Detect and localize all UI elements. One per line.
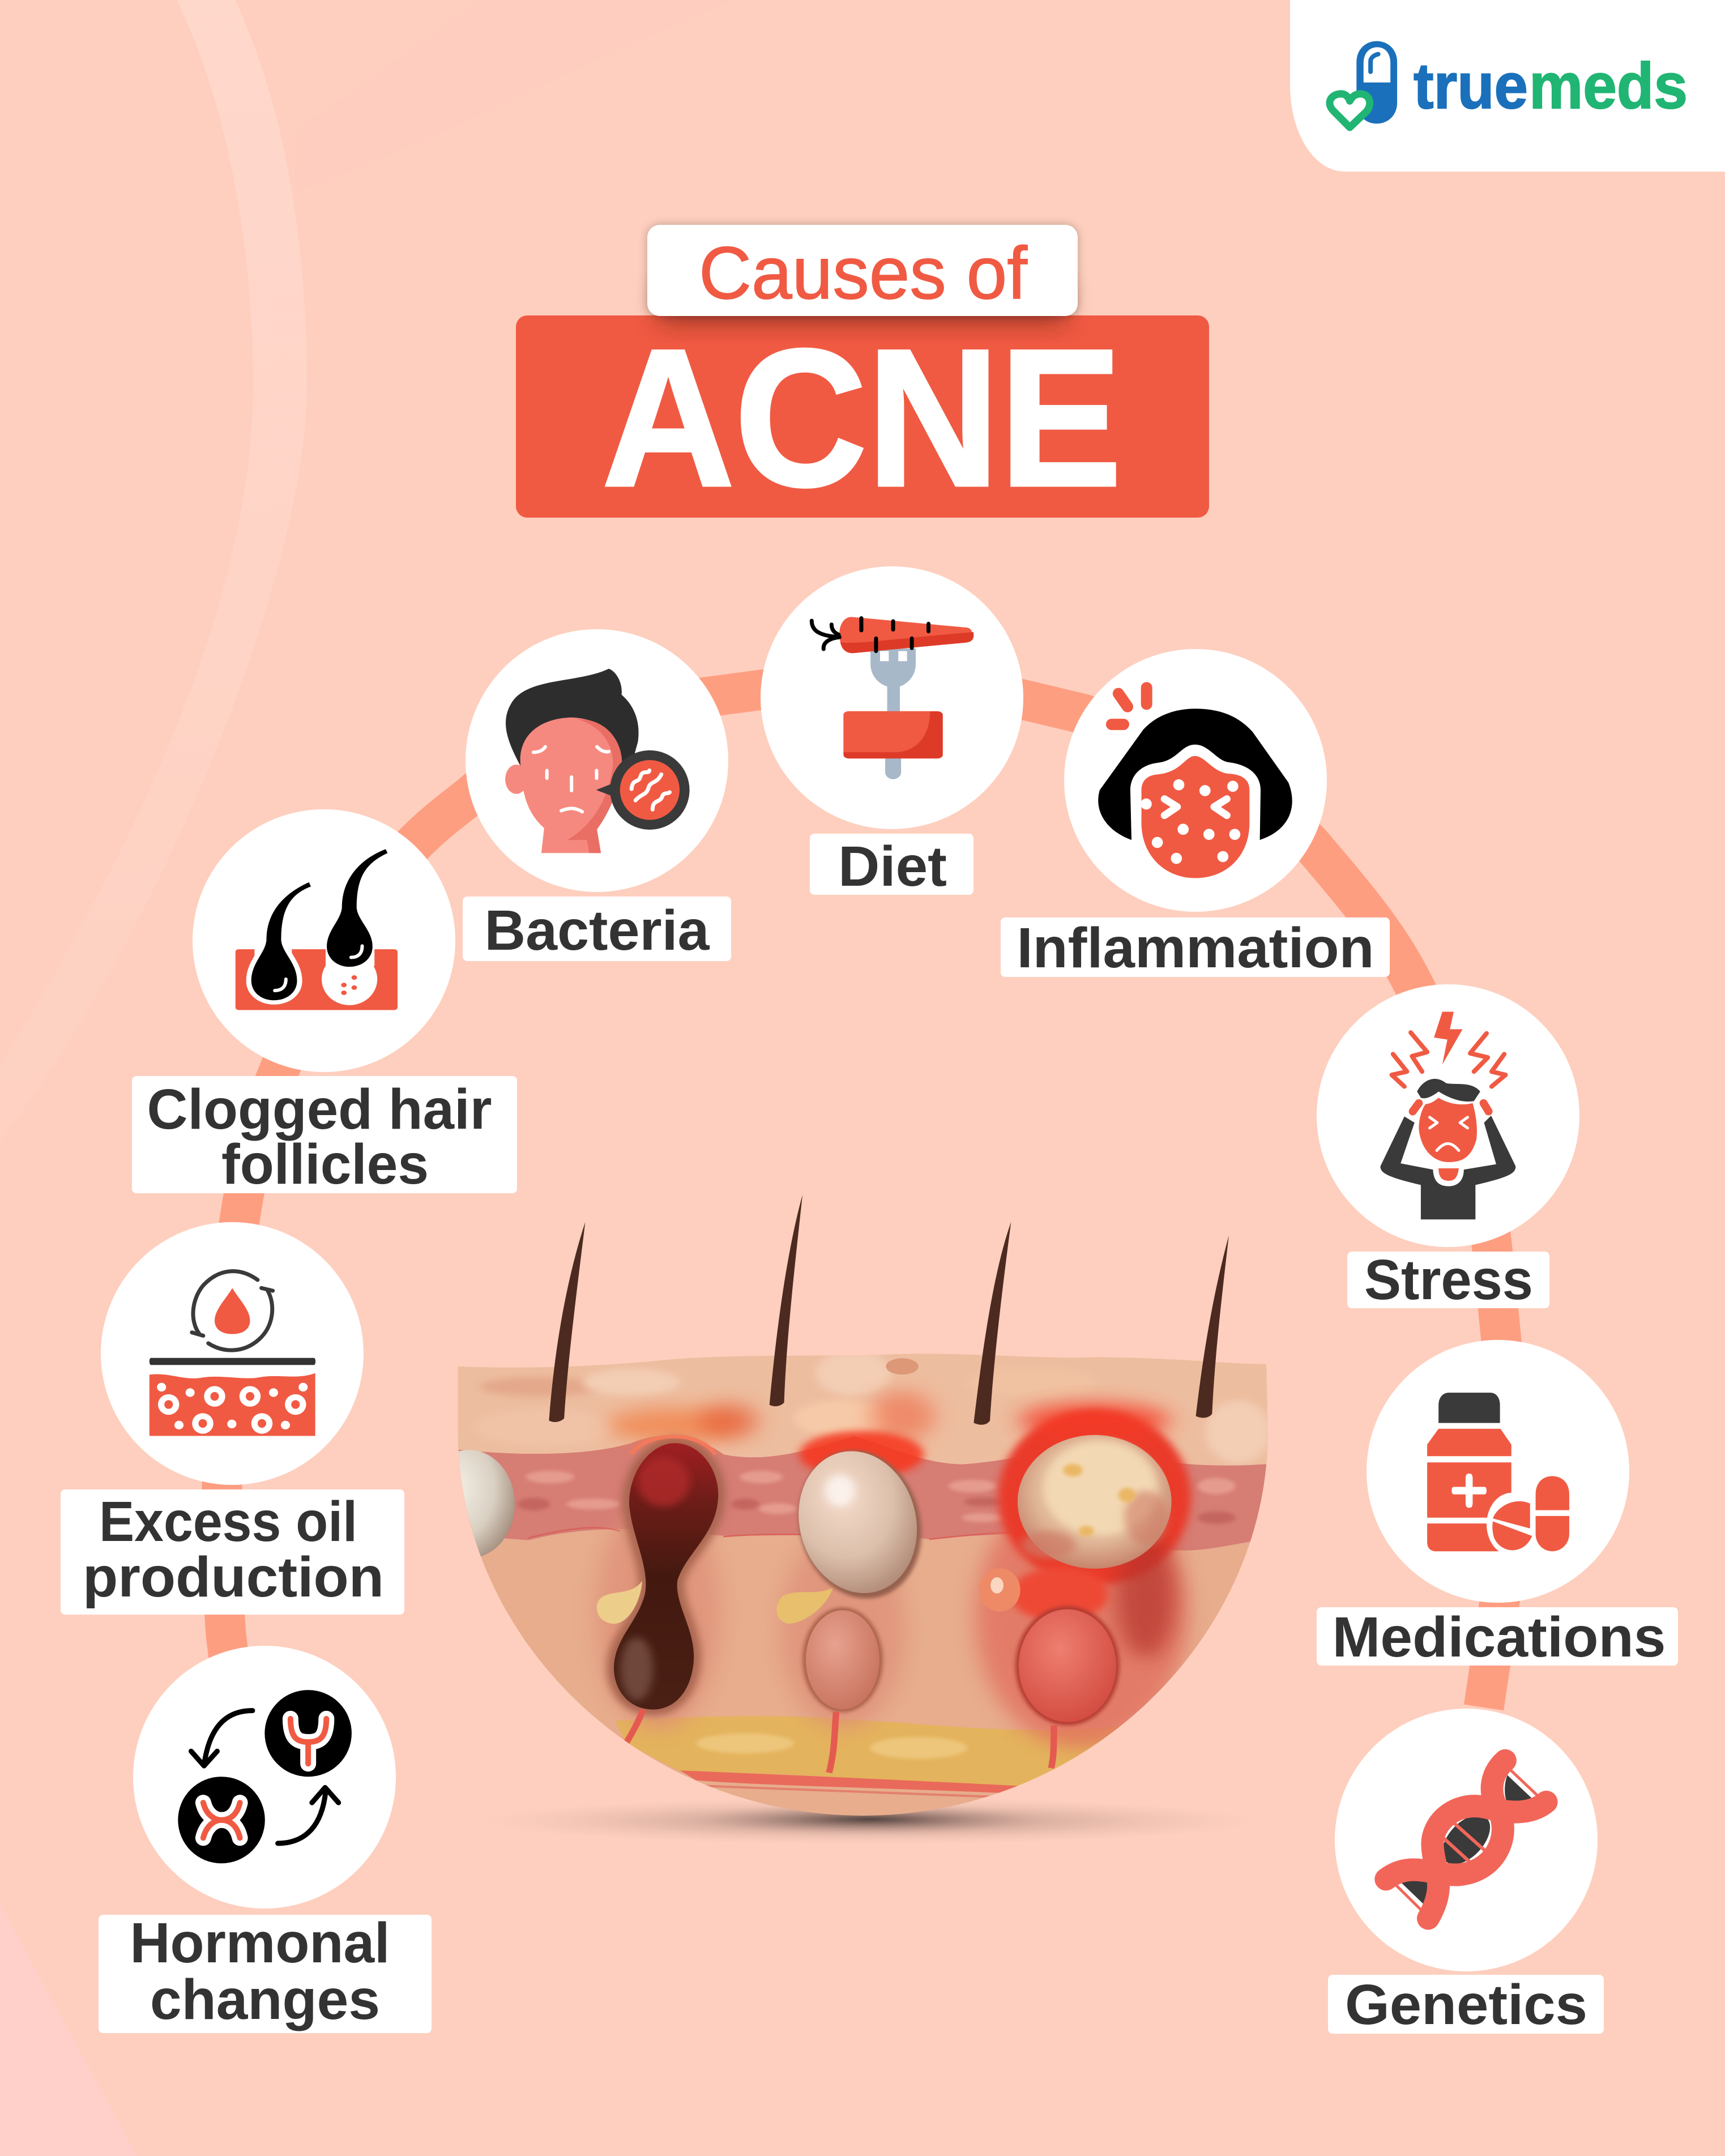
pustule: [1015, 1606, 1120, 1725]
icon: face with bacteria: [505, 669, 690, 853]
title: Causes of: Causes of: [699, 231, 1028, 314]
logo wordmark: meds: [1529, 50, 1688, 122]
panel: Diet: [761, 566, 1023, 898]
title: ACNE banner: ACNE: [602, 309, 1122, 527]
label: Clogged hair follicles: Clogged hair: [147, 1078, 492, 1141]
icon: fork with carrot and food: [812, 617, 973, 779]
label: Clogged hair follicles: follicles: [221, 1133, 429, 1196]
sebaceous glands: [597, 1581, 642, 1624]
label: Diet: [810, 834, 973, 898]
dark comedo: [614, 1443, 718, 1710]
icon: medicine bottle and pills: [1427, 1393, 1569, 1556]
ground shadow: [480, 1798, 1259, 1845]
logo panel: [1290, 0, 1725, 172]
icon: DNA helix: [1386, 1761, 1547, 1918]
panel: Bacteria: [463, 629, 731, 962]
label: Clogged hair follicles: [132, 1076, 517, 1196]
label: Bacteria: Bacteria: [485, 899, 710, 962]
icon: stressed person: [1380, 1012, 1515, 1219]
skin cross-section illustration: [423, 1195, 1309, 1845]
icon: chromosomes: [178, 1690, 352, 1863]
label: Inflammation: Inflammation: [1017, 916, 1374, 980]
label: Stress: Stress: [1364, 1248, 1533, 1312]
label: Genetics: Genetics: [1345, 1973, 1587, 2037]
label: Excess oil production: production: [83, 1546, 384, 1609]
dermis band: [442, 1436, 1297, 1551]
label: Medications: Medications: [1332, 1606, 1666, 1669]
panel: Hormonal changes: [99, 1646, 432, 2033]
vessels: [626, 1710, 1054, 1773]
label: Excess oil production: [61, 1489, 404, 1615]
label: Diet: Diet: [838, 835, 947, 898]
label: Hormonal changes: changes: [150, 1968, 380, 2031]
connecting arc: [222, 683, 1507, 1710]
icon: inflamed face: [1098, 688, 1292, 878]
panel: Genetics: [1328, 1709, 1604, 2037]
label: Hormonal changes: [99, 1911, 432, 2033]
closed follicle: whitehead: [802, 1607, 883, 1712]
panel: Stress: [1317, 984, 1579, 1312]
logo wordmark: [1414, 50, 1688, 122]
icon: oil drop on skin: [150, 1271, 315, 1436]
logo icon: capsule and heart: [1330, 41, 1397, 127]
hairs: [549, 1195, 1229, 1425]
logo wordmark: true: [1414, 50, 1528, 122]
panel: Inflammation: [1001, 649, 1390, 980]
icon: hair follicles: [236, 849, 398, 1010]
label: Excess oil production: Excess oil: [99, 1490, 357, 1553]
panel: Clogged hair follicles: [132, 809, 517, 1196]
panel: Excess oil production: [61, 1222, 404, 1615]
fat layer: [615, 1716, 1146, 1788]
inflammation glows: [607, 1408, 742, 1442]
left white bump: [423, 1450, 515, 1559]
label: Hormonal changes: Hormonal: [130, 1911, 390, 1975]
panel: Medications: [1317, 1340, 1678, 1669]
decorative swoosh: [0, 0, 736, 2156]
skin layers: [458, 1354, 1268, 1816]
